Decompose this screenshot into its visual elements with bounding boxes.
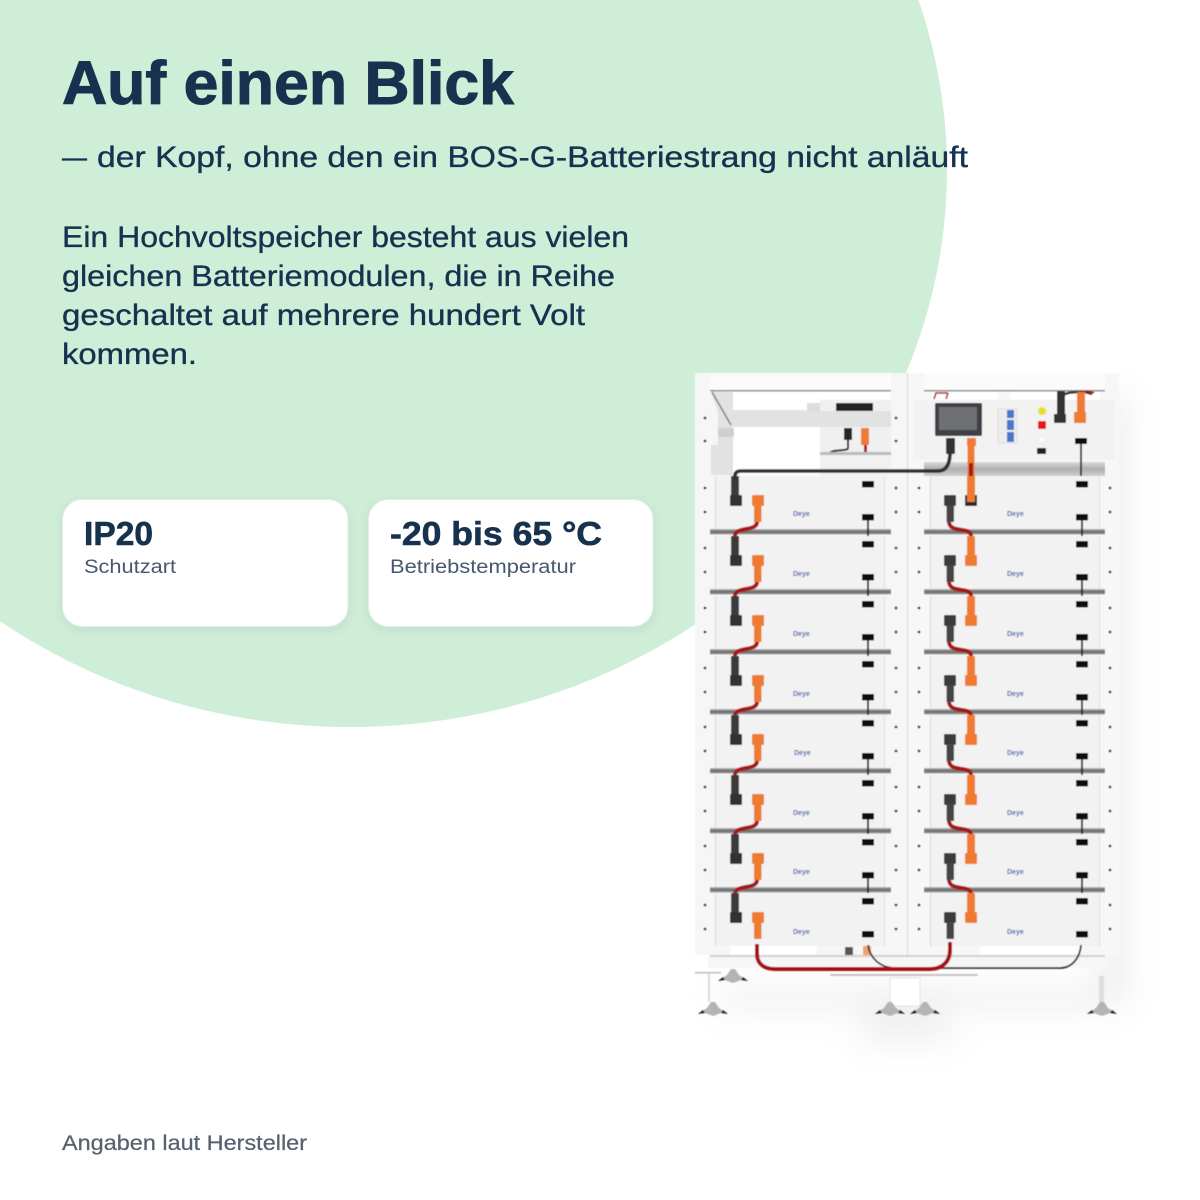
card value: temperature range: -20 bis 65 °C bbox=[390, 515, 602, 552]
control panel bbox=[913, 391, 1115, 478]
touch display bbox=[935, 403, 982, 436]
intro paragraph: Ein Hochvoltspeicher besteht aus vielen bbox=[62, 221, 629, 254]
base frame bbox=[708, 946, 1108, 968]
left top compartment bbox=[711, 392, 891, 475]
subtitle: der Kopf, ohne den ein BOS-G-Batteriestrang nicht anläuft bbox=[97, 141, 969, 174]
title: Auf einen Blick bbox=[62, 49, 514, 117]
module rows left column: Deye bbox=[793, 631, 810, 638]
intro paragraph: kommen. bbox=[62, 338, 197, 371]
background circle bbox=[0, 0, 947, 727]
module rows right column: Deye bbox=[1007, 869, 1024, 876]
module rows right column: Deye bbox=[1007, 750, 1024, 757]
module rows right column bbox=[918, 476, 1111, 946]
battery rack illustration bbox=[695, 373, 1126, 1042]
module rows left column: Deye bbox=[793, 691, 810, 698]
module rows right column: Deye bbox=[1007, 511, 1024, 518]
module rows left column: Deye bbox=[793, 571, 810, 578]
module rows left column: Deye bbox=[793, 869, 810, 876]
card: Betriebstemperatur bbox=[368, 500, 653, 626]
module rows right column: Deye bbox=[1007, 929, 1024, 936]
module rows right column: Deye bbox=[1007, 691, 1024, 698]
intro paragraph: gleichen Batteriemodulen, die in Reihe bbox=[62, 260, 615, 293]
top cabling bbox=[735, 438, 977, 506]
module rows right column: Deye bbox=[1007, 571, 1024, 578]
bottom cabling bbox=[757, 942, 1081, 969]
intro paragraph: geschaltet auf mehrere hundert Volt bbox=[62, 299, 586, 332]
rack frame bbox=[695, 373, 1119, 963]
card label: Betriebstemperatur: Betriebstemperatur bbox=[390, 557, 577, 578]
module rows left column: Deye bbox=[793, 929, 810, 936]
circuit breaker bbox=[998, 409, 1017, 443]
card value: IP20: IP20 bbox=[84, 515, 153, 552]
top connectors bbox=[1054, 391, 1094, 478]
module rows left column: Deye bbox=[794, 750, 811, 757]
subtitle: — bbox=[62, 141, 87, 174]
support feet bbox=[695, 969, 1117, 1016]
module rows left column bbox=[704, 476, 897, 946]
card label: Schutzart: Schutzart bbox=[84, 557, 177, 578]
card: Schutzart bbox=[62, 500, 348, 626]
module rows right column: Deye bbox=[1007, 631, 1024, 638]
module rows left column: Deye bbox=[793, 810, 810, 817]
module rows right column: Deye bbox=[1007, 810, 1024, 817]
module rows left column: Deye bbox=[793, 511, 810, 518]
indicator buttons bbox=[1037, 407, 1046, 454]
intro paragraph bbox=[62, 221, 629, 371]
rack drop shadow bbox=[720, 395, 1126, 1042]
footer note: Angaben laut Hersteller bbox=[62, 1132, 307, 1155]
